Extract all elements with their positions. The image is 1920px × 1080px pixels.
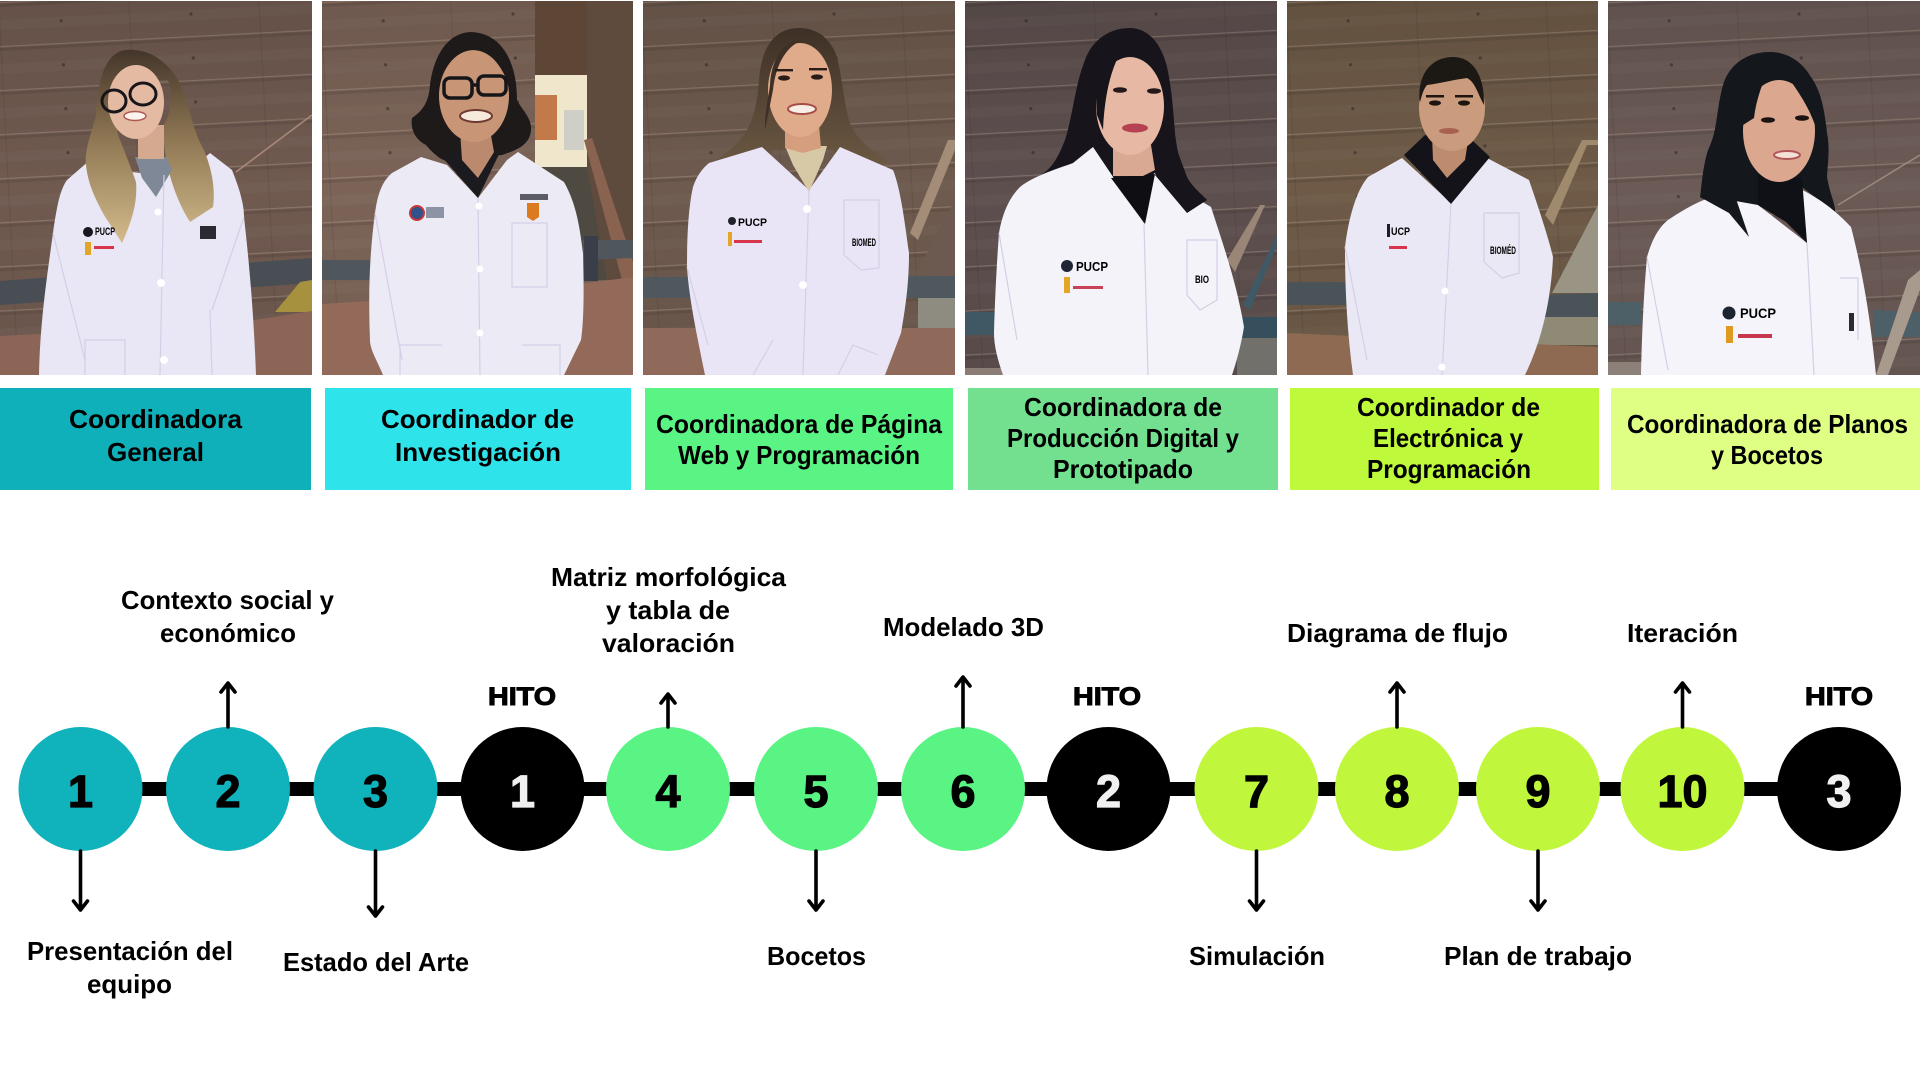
smile	[124, 112, 146, 120]
step 1	[18, 727, 142, 851]
role card: Coordinadora de Página Web y Programación: Coordinadora de Página	[656, 409, 942, 439]
arrow: step 5 down	[809, 851, 823, 910]
hair fringe	[1096, 40, 1130, 130]
step 7	[1194, 727, 1318, 851]
step 3	[314, 727, 438, 851]
lab coat	[369, 152, 584, 375]
smile	[460, 110, 492, 122]
photo: Coordinador de Electrónica	[1287, 0, 1598, 375]
label: Matriz morfológica y tabla de valoración: valoración	[602, 628, 735, 658]
face	[439, 50, 509, 142]
hair	[86, 50, 214, 243]
label: Matriz morfológica y tabla de valoración: Matriz morfológica	[551, 562, 787, 592]
photo: Coordinador de Investigación	[322, 0, 633, 375]
photo: Coordinador de Electrónica: BIOMÉD	[1490, 244, 1516, 257]
label: Matriz morfológica y tabla de valoración: y tabla de	[606, 595, 730, 625]
hair	[1028, 28, 1207, 213]
label: Bocetos: Bocetos	[767, 941, 866, 971]
label: Presentación del equipo	[27, 936, 233, 999]
arrow: step 3 down	[368, 851, 382, 916]
neck	[785, 125, 821, 153]
neck	[138, 125, 164, 159]
face	[108, 65, 164, 139]
arrow: step 8 up	[1390, 683, 1404, 727]
smile	[1774, 151, 1800, 159]
face	[1419, 65, 1485, 151]
hair fringe	[1743, 60, 1773, 125]
neck	[1113, 145, 1155, 176]
label: HITO 3: HITO	[1805, 683, 1873, 711]
logos	[1722, 306, 1736, 320]
coat details	[53, 175, 244, 375]
lab coat	[39, 153, 256, 375]
photo: Coordinadora de Producción Digital	[965, 0, 1277, 375]
photo: Coordinadora de Página Web: PUCP	[738, 217, 767, 229]
face	[1743, 80, 1815, 182]
neck	[1432, 135, 1469, 178]
logos	[728, 217, 736, 225]
role card: Coordinadora de Producción Digital y Prototipado: Prototipado	[1053, 454, 1193, 484]
face	[1096, 57, 1164, 155]
timeline	[18, 727, 1901, 851]
step 5	[754, 727, 878, 851]
milestone 2: 2	[1096, 766, 1121, 817]
step 8	[1335, 727, 1459, 851]
photo: Coordinador de Electrónica: UCP	[1391, 226, 1410, 238]
lab coat	[687, 147, 909, 375]
photo: Coordinadora de Página Web	[643, 0, 955, 375]
lab coat	[1641, 190, 1876, 375]
coat details	[999, 224, 1217, 375]
arrow: step 1 down	[74, 851, 88, 910]
role card: Coordinador de Investigación: Investigación	[395, 437, 561, 467]
step 4	[606, 727, 730, 851]
step 2: 2	[215, 766, 241, 817]
label: Estado del Arte: Estado del Arte	[283, 947, 469, 977]
role card: Coordinadora de Producción Digital y Prototipado: Producción Digital y	[1007, 423, 1239, 453]
photo: Coordinadora de Producción Digital: BIO	[1195, 274, 1209, 286]
step 8: 8	[1384, 766, 1410, 817]
role card: Coordinadora de Planos y Bocetos	[1611, 388, 1920, 490]
arrow: step 6 up	[956, 677, 970, 727]
label: Contexto social y económico: Contexto social y	[121, 585, 335, 615]
hoodie	[442, 145, 501, 198]
face	[768, 43, 832, 137]
arrow: step 4 up	[661, 694, 675, 727]
role card: Coordinadora de Producción Digital y Prototipado: Coordinadora de	[1024, 392, 1222, 422]
hair lock over coat	[1155, 150, 1207, 213]
sweater	[135, 157, 172, 197]
logos	[1061, 260, 1073, 272]
step 5: 5	[803, 766, 829, 817]
milestone 1: 1	[510, 766, 535, 817]
eyes	[775, 68, 827, 81]
milestone 2	[1046, 727, 1170, 851]
step 10: 10	[1658, 766, 1708, 817]
neck	[460, 130, 494, 178]
step 9: 9	[1525, 766, 1551, 817]
role card: Coordinador de Investigación: Coordinador de	[381, 404, 574, 434]
milestone 3: 3	[1826, 766, 1852, 817]
smile	[788, 104, 816, 114]
logos	[1387, 224, 1390, 237]
step 3: 3	[363, 766, 388, 817]
turtleneck	[1758, 175, 1807, 243]
lab coat	[994, 147, 1244, 375]
role card: Coordinador de Investigación	[325, 388, 631, 490]
hoodie	[1404, 135, 1490, 204]
arrow: step 2 up	[221, 683, 235, 727]
photo: Coordinadora de Página Web: BIOMED	[852, 237, 876, 249]
role card: Coordinadora de Planos y Bocetos: Coordinadora de Planos	[1627, 409, 1908, 439]
milestone 1	[460, 727, 584, 851]
arrow: step 7 down	[1250, 851, 1264, 910]
coat details	[1345, 204, 1519, 375]
step 6: 6	[950, 766, 976, 817]
eyes	[1426, 95, 1473, 106]
label: Simulación: Simulación	[1189, 941, 1325, 971]
label: Iteración: Iteración	[1627, 618, 1738, 648]
role card: Coordinadora General: Coordinadora	[69, 404, 243, 434]
sweater	[785, 146, 827, 192]
hair strands	[765, 40, 803, 130]
coat details	[375, 198, 560, 375]
shirt	[1111, 174, 1155, 224]
label: Presentación del equipo: Presentación del	[27, 936, 233, 966]
lips	[1439, 128, 1459, 134]
photo: Coordinadora de Planos	[1608, 0, 1920, 375]
eyes	[1761, 115, 1809, 123]
hair strand	[1700, 190, 1749, 237]
photo: Coordinadora General	[0, 0, 312, 375]
hair fringe	[437, 42, 510, 90]
role card: Coordinador de Electrónica y Programación: Coordinador de	[1357, 392, 1540, 422]
step 4: 4	[655, 766, 681, 817]
label: HITO 2: HITO	[1073, 683, 1141, 711]
eyes	[1113, 87, 1161, 94]
role card: Coordinadora General: General	[107, 437, 204, 467]
step 10	[1620, 727, 1744, 851]
glasses	[102, 83, 156, 112]
coat details	[687, 190, 879, 375]
step 9	[1476, 727, 1600, 851]
label: Diagrama de flujo: Diagrama de flujo	[1287, 618, 1508, 648]
label: Modelado 3D: Modelado 3D	[883, 612, 1044, 642]
label: HITO 1: HITO	[488, 683, 556, 711]
role card: Coordinador de Electrónica y Programación: Electrónica y	[1373, 423, 1523, 453]
glasses	[444, 76, 506, 98]
logo	[83, 227, 93, 237]
label: Contexto social y económico	[121, 585, 335, 648]
photo: Coordinadora de Producción Digital: PUCP	[1076, 259, 1108, 274]
step 6	[901, 727, 1025, 851]
step 2	[166, 727, 290, 851]
role card: Coordinador de Electrónica y Programación: Programación	[1367, 454, 1531, 484]
lips	[1122, 124, 1148, 132]
role card: Coordinadora de Página Web y Programación: Web y Programación	[678, 440, 920, 470]
arrow: step 9 down	[1531, 851, 1545, 910]
arrow: step 10 up	[1676, 683, 1690, 727]
logos	[410, 206, 424, 220]
role card: Coordinadora General	[0, 388, 311, 490]
label: Plan de trabajo: Plan de trabajo	[1444, 941, 1632, 971]
step 1: 1	[68, 766, 93, 817]
photo: Coordinadora de Planos: PUCP	[1740, 305, 1776, 321]
milestone 3	[1777, 727, 1901, 851]
hair	[412, 32, 531, 161]
step 7: 7	[1244, 766, 1269, 817]
photo: Coordinadora General: PUCP	[95, 226, 115, 238]
hair	[718, 28, 888, 172]
lab coat	[1345, 158, 1553, 375]
label: Presentación del equipo: equipo	[87, 969, 172, 999]
role card: Coordinador de Electrónica y Programación	[1290, 388, 1599, 490]
hair	[1419, 57, 1484, 105]
hair	[1700, 52, 1835, 237]
role card: Coordinadora de Página Web y Programación	[645, 388, 953, 490]
role card: Coordinadora de Planos y Bocetos: y Bocetos	[1711, 440, 1823, 470]
label: Contexto social y económico: económico	[160, 618, 296, 648]
role card: Coordinadora de Producción Digital y Prototipado	[968, 388, 1278, 490]
coat details	[1647, 243, 1858, 375]
label: Matriz morfológica y tabla de valoración	[551, 562, 787, 658]
